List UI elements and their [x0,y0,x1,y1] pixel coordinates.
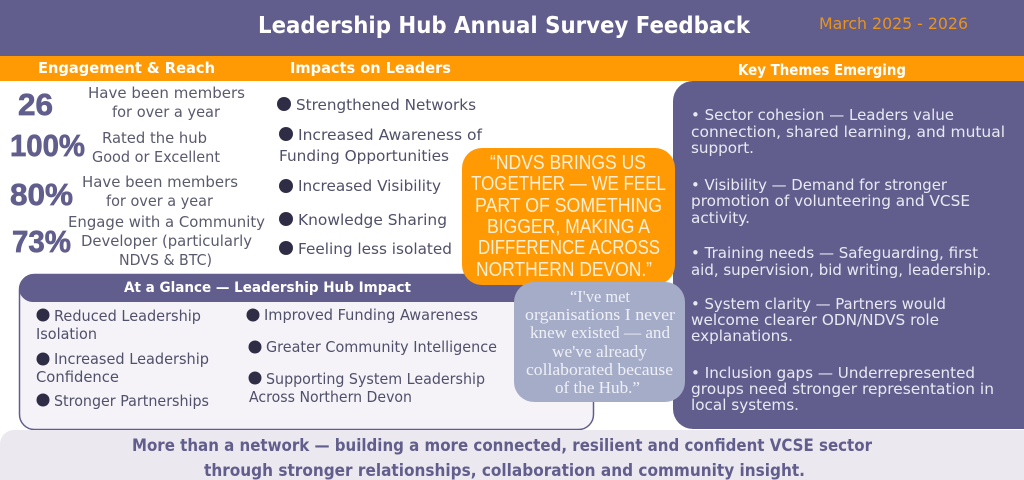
panel: at a glance [19,274,594,430]
stat: 80 percent members: for over a year [106,192,214,210]
theme: inclusion gaps [691,364,994,414]
theme: training needs: aid, supervision, bid writing, leadership. [691,261,991,279]
callout: lilac quote: knew existed — and [530,323,670,342]
theme: system clarity: welcome clearer ODN/NDVS role [691,311,939,329]
stat: 100 percent rating: 100% [10,128,85,163]
callout: lilac quote [514,282,685,402]
stat: 80 percent members [10,173,238,212]
item: funding awareness: Funding Opportunities [279,147,449,165]
item: visibility: Increased Visibility [298,177,441,195]
callout: orange quote: NORTHERN DEVON.” [476,258,652,281]
item: leadership confidence: Confidence [36,368,119,386]
theme: sector cohesion: support. [691,139,754,157]
callout: orange quote: TOGETHER — WE FEEL [471,172,666,195]
theme: sector cohesion [691,106,1005,157]
theme: inclusion gaps: groups need stronger representation in [691,380,994,398]
item: system leadership [248,370,485,406]
callout: lilac quote: of the Hub.” [555,378,640,397]
callout: orange quote: BIGGER, MAKING A [487,215,650,238]
item: leadership confidence [36,350,209,386]
callout: orange quote: “NDVS BRINGS US [490,151,646,174]
item: system leadership: Supporting System Leadership [266,370,485,388]
callout: orange quote: DIFFERENCE ACROSS [478,236,660,259]
stat: 73 percent community developer: Developer (particularly [81,232,252,250]
date range: March 2025 - 2026 [819,14,968,33]
stat: 100 percent rating: Good or Excellent [92,148,220,166]
item: reduced isolation: Isolation [36,325,97,343]
at a glance heading: At a Glance — Leadership Hub Impact [124,280,411,296]
theme: training needs: • Training needs — Safeguarding, first [691,244,978,262]
callout: lilac quote: collaborated because [526,360,673,379]
callout: lilac quote: organisations I never [525,305,675,324]
callout: orange quote [462,148,675,285]
panel: engagement statistics [10,84,265,269]
item: community intelligence: Greater Community Intelligence [266,338,497,356]
at a glance header [19,274,594,302]
theme: visibility [691,176,970,227]
item: knowledge sharing: Knowledge Sharing [298,211,447,229]
footer banner: More than a network — building a more connected, resilient and confident VCSE sector [132,436,872,456]
stat: 73 percent community developer: Engage with a Community [68,213,265,231]
stat: 26 members: 26 [18,87,53,122]
heading: key themes emerging: Key Themes Emerging [738,61,906,79]
item: reduced isolation: Reduced Leadership [54,307,201,325]
theme: system clarity: • System clarity — Partners would [691,295,946,313]
stat: 80 percent members: Have been members [82,173,238,191]
stat: 26 members [18,84,245,122]
theme: sector cohesion: connection, shared learning, and mutual [691,123,1005,141]
stat: 26 members: Have been members [88,84,245,102]
panel: impacts list [277,96,483,258]
item: reduced isolation [36,307,201,343]
callout: orange quote: PART OF SOMETHING [475,194,662,217]
footer banner [0,430,1024,480]
theme: visibility: promotion of volunteering and VCSE [691,192,970,210]
stat: 26 members: for over a year [112,103,221,121]
orange section heading band [0,56,1024,81]
callout: lilac quote: “I've met [570,287,630,306]
heading: engagement and reach: Engagement & Reach [38,59,215,77]
item: less isolated: Feeling less isolated [298,240,452,258]
stat: 73 percent community developer: 73% [12,224,71,259]
theme: system clarity: explanations. [691,327,793,345]
theme: visibility: activity. [691,209,750,227]
stat: 73 percent community developer: NDVS & BTC) [119,251,212,269]
item: leadership confidence: Increased Leadership [54,350,209,368]
item: funding awareness [279,126,483,165]
theme: sector cohesion: • Sector cohesion — Leaders value [691,106,954,124]
item: system leadership: Across Northern Devon [249,388,412,406]
theme: training needs [691,244,991,279]
header banner [0,0,1024,56]
item: funding awareness: Improved Funding Awareness [264,306,478,324]
item: stronger partnerships: Stronger Partnerships [54,392,209,410]
stat: 100 percent rating [10,128,220,166]
stat: 80 percent members: 80% [10,177,73,212]
theme: inclusion gaps: local systems. [691,396,799,414]
theme: visibility: • Visibility — Demand for stronger [691,176,948,194]
panel: key themes [673,81,1024,429]
item: funding awareness: Increased Awareness of [298,126,483,144]
heading: impacts on leaders: Impacts on Leaders [290,59,451,77]
theme: inclusion gaps: • Inclusion gaps — Underrepresented [691,364,975,382]
item: strengthened networks: Strengthened Networks [296,96,476,114]
theme: system clarity [691,295,946,345]
stat: 100 percent rating: Rated the hub [102,129,207,147]
title: Leadership Hub Annual Survey Feedback [258,13,751,39]
stat: 73 percent community developer [12,213,265,269]
callout: lilac quote: we've already [552,342,648,361]
